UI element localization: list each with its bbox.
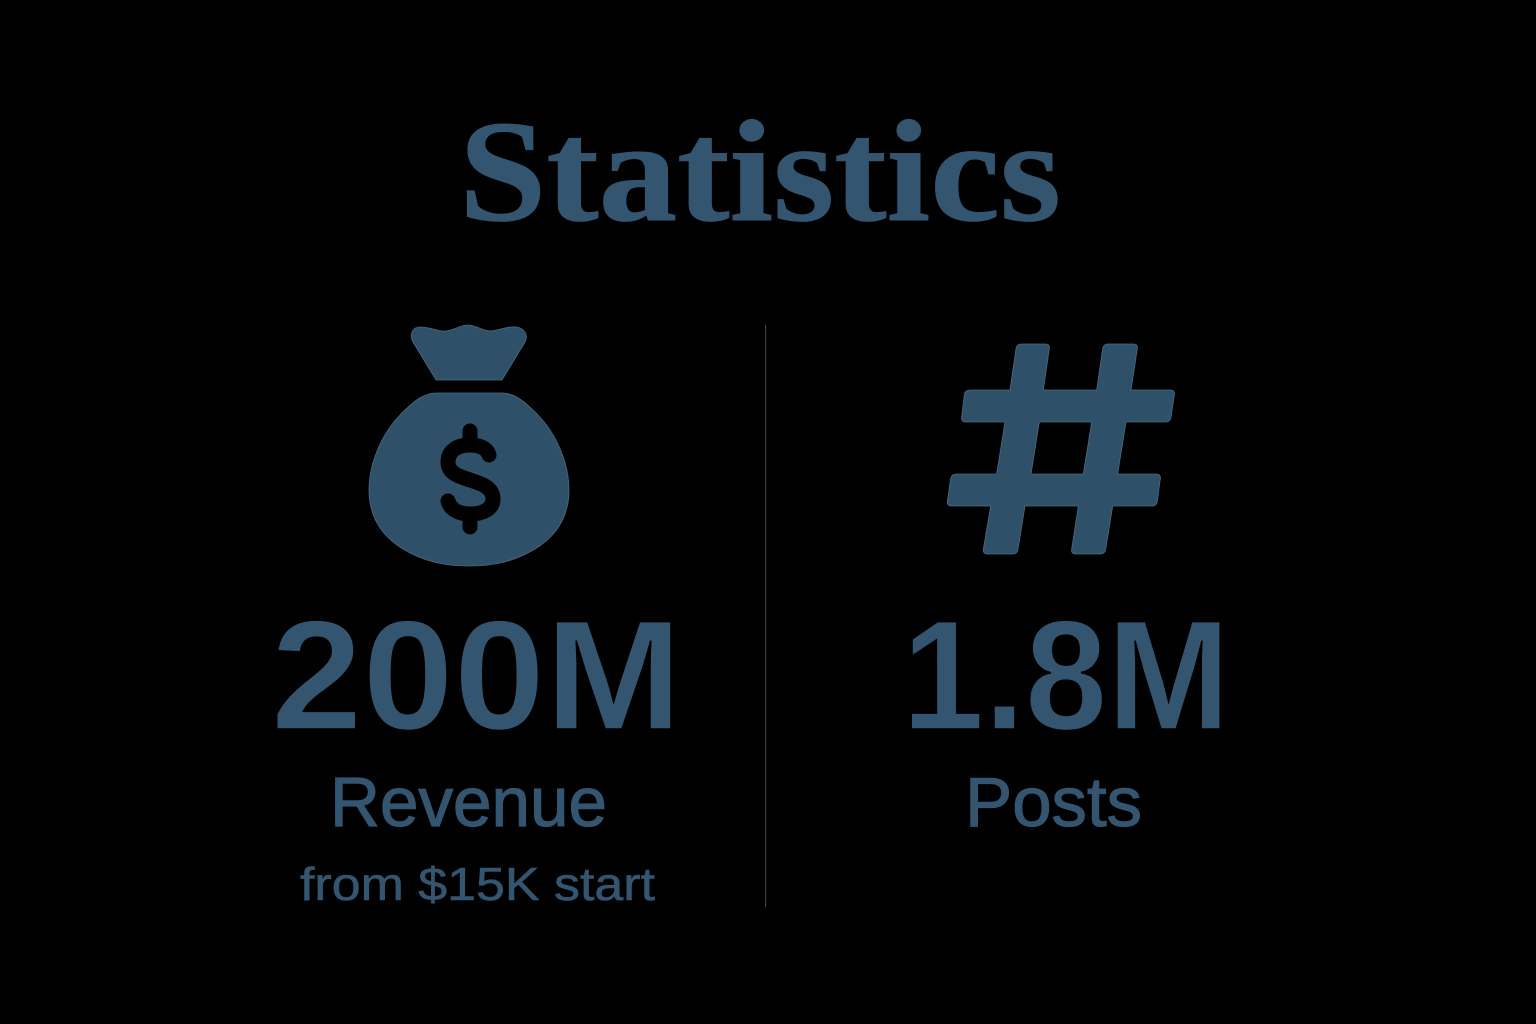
- icon: money bag: [369, 325, 569, 566]
- stat label: Revenue: Revenue: [330, 763, 607, 841]
- panel: revenue: [271, 325, 682, 910]
- title: Statistics: [459, 92, 1061, 252]
- stat value: 1.8M: 1.8M: [902, 589, 1230, 763]
- panel: posts: [902, 344, 1230, 841]
- stat label: Posts: Posts: [965, 763, 1142, 841]
- icon: hash: [947, 344, 1174, 554]
- stat note: from $15K start: from $15K start: [300, 858, 655, 910]
- divider: [765, 325, 766, 907]
- stat value: 200M: 200M: [271, 589, 682, 763]
